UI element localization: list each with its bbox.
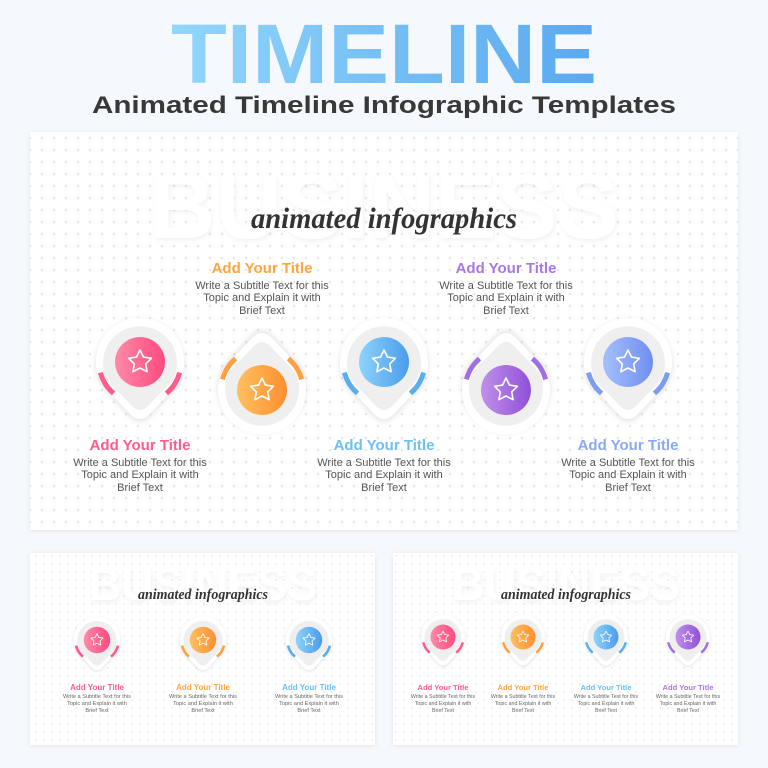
panel: main slide (30, 132, 738, 530)
subtitle: Animated Timeline Infographic Templates (92, 92, 676, 119)
pin 5 (584, 318, 672, 419)
watermark heading: BUSINESS (89, 558, 317, 610)
text 3: Add Your Title (334, 437, 434, 454)
text 1: Add Your Title (90, 437, 190, 454)
text 4: Topic and Explain it with (447, 292, 565, 304)
small texts: Topic and Explain it with (660, 701, 716, 707)
text 5: Topic and Explain it with (569, 469, 687, 481)
pin 2 (218, 333, 306, 434)
small texts: Topic and Explain it with (495, 701, 551, 707)
watermark heading: BUSINESS (149, 156, 619, 258)
small texts: Brief Text (595, 708, 618, 714)
small texts: Write a Subtitle Text for this (491, 694, 555, 700)
text 2 (195, 260, 329, 317)
text 3: Brief Text (361, 482, 407, 494)
small texts: Topic and Explain it with (173, 701, 233, 707)
script heading: animated infographics (501, 587, 631, 603)
text 4 (439, 260, 573, 317)
pins row (421, 615, 710, 666)
small texts: Brief Text (432, 708, 455, 714)
small texts: Brief Text (677, 708, 700, 714)
text 3: Write a Subtitle Text for this (317, 457, 451, 469)
text 4: Write a Subtitle Text for this (439, 280, 573, 292)
small texts: Write a Subtitle Text for this (63, 694, 131, 700)
panel: small slide 3 items (30, 553, 375, 745)
small texts: Brief Text (297, 708, 321, 714)
text 4: Brief Text (483, 305, 529, 317)
panel: small slide 4 items (393, 553, 738, 745)
small texts: Topic and Explain it with (415, 701, 471, 707)
small texts: Write a Subtitle Text for this (656, 694, 720, 700)
small texts: Brief Text (191, 708, 215, 714)
small texts: Add Your Title (282, 683, 336, 692)
title: TIMELINE (171, 7, 597, 101)
small texts: Brief Text (512, 708, 535, 714)
text 2: Add Your Title (212, 260, 312, 277)
small texts: Add Your Title (70, 683, 124, 692)
small texts: Write a Subtitle Text for this (411, 694, 475, 700)
pin 4 (462, 333, 550, 434)
text 1: Topic and Explain it with (81, 469, 199, 481)
text 2: Write a Subtitle Text for this (195, 280, 329, 292)
text 5: Brief Text (605, 482, 651, 494)
text 1: Write a Subtitle Text for this (73, 457, 207, 469)
small texts: Topic and Explain it with (279, 701, 339, 707)
small texts: Topic and Explain it with (67, 701, 127, 707)
pin 3 (340, 318, 428, 419)
text 2: Brief Text (239, 305, 285, 317)
text 5: Write a Subtitle Text for this (561, 457, 695, 469)
text 3: Topic and Explain it with (325, 469, 443, 481)
watermark heading: BUSINESS (452, 558, 680, 610)
small texts: Brief Text (85, 708, 109, 714)
small texts: Write a Subtitle Text for this (169, 694, 237, 700)
text 1 (73, 437, 207, 494)
script heading: animated infographics (251, 202, 517, 235)
small texts: Add Your Title (662, 683, 714, 692)
small texts (411, 683, 720, 714)
small texts: Write a Subtitle Text for this (574, 694, 638, 700)
text 3 (317, 437, 451, 494)
small texts: Write a Subtitle Text for this (275, 694, 343, 700)
small texts: Topic and Explain it with (578, 701, 634, 707)
small texts (63, 683, 343, 714)
text 4: Add Your Title (456, 260, 556, 277)
small texts: Add Your Title (417, 683, 469, 692)
pins row (74, 617, 332, 670)
text 5: Add Your Title (578, 437, 678, 454)
small texts: Add Your Title (580, 683, 632, 692)
pin 1 (96, 318, 184, 419)
text 2: Topic and Explain it with (203, 292, 321, 304)
text 1: Brief Text (117, 482, 163, 494)
text 5 (561, 437, 695, 494)
script heading: animated infographics (138, 587, 268, 603)
small texts: Add Your Title (176, 683, 230, 692)
small texts: Add Your Title (497, 683, 549, 692)
